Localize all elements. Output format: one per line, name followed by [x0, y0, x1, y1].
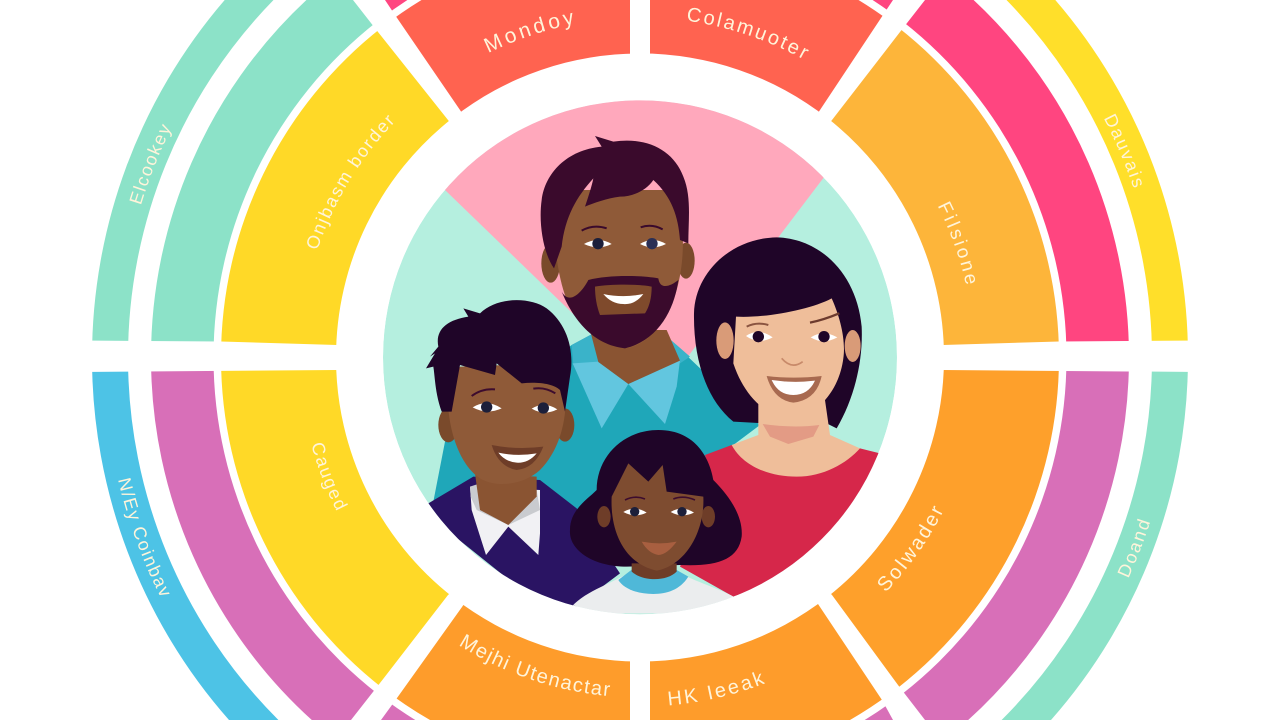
label: upper left outer: Elcookey	[129, 124, 172, 204]
figure: father	[433, 136, 760, 513]
label: lower left outer: N/Ey Coinbav	[118, 478, 170, 595]
center portrait	[383, 80, 897, 614]
label: bottom left: Mejhi Utenactar	[460, 634, 610, 696]
label: bottom right: HK Ieeak	[668, 672, 766, 706]
panel: inner ring segments	[221, 0, 1059, 720]
panel: middle ring segments	[151, 0, 1129, 720]
label: lower right inner: Solwader	[878, 506, 942, 590]
figure: mother	[680, 237, 880, 597]
label: lower right outer: Doand	[1118, 518, 1150, 578]
label: upper left inner: Onjbasm border	[307, 115, 394, 248]
figure: girl	[570, 430, 742, 613]
label: upper right inner: Filsione	[938, 201, 975, 284]
figure: boy	[426, 300, 620, 608]
portrait background	[383, 80, 897, 614]
label: upper right outer: Dauvais	[1104, 114, 1142, 188]
label: top left: Mondoy	[484, 12, 572, 52]
label: lower left inner: Cauged	[312, 443, 348, 510]
label: top right: Colamuoter	[688, 8, 809, 58]
